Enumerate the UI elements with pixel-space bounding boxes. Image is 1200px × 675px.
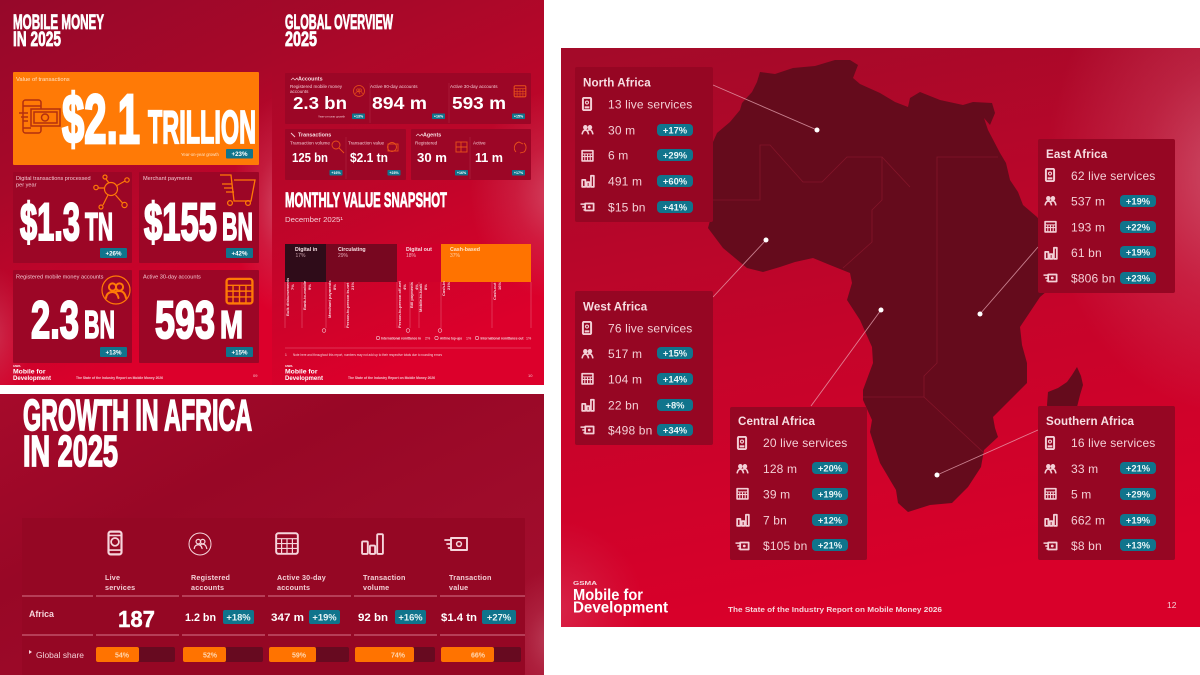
callout: west africa: $498 bn	[608, 424, 652, 438]
card: agents	[411, 129, 531, 180]
callout: west africa: West Africa	[583, 300, 648, 314]
map: regional borders	[713, 145, 998, 452]
chart: monthly value bars: 21%	[350, 282, 355, 290]
chart: monthly value bars: 37%	[450, 253, 461, 259]
growth badges: +15%	[514, 115, 524, 119]
heading	[23, 391, 252, 476]
heading: 2025	[285, 28, 317, 51]
growth badges: +16%	[457, 171, 467, 175]
footer	[285, 365, 533, 382]
footer: Development	[573, 600, 668, 616]
card: active accounts: M	[220, 304, 243, 347]
chart: monthly value bars: 29%	[338, 253, 349, 259]
card: registered accounts: BN	[84, 304, 115, 347]
callout: west africa: 104 m	[608, 372, 642, 386]
chart: monthly value bars: Digital out	[406, 247, 432, 253]
row: global share bars: Global share	[36, 651, 84, 660]
column headers: Live	[105, 573, 120, 582]
growth badge: +23%	[232, 151, 248, 158]
chart: monthly value bars: Mobile-to-bank	[418, 283, 423, 312]
column headers: Active 30-day	[277, 573, 326, 582]
callout: west africa: +14%	[663, 374, 688, 384]
callout: west africa: 76 live services	[608, 322, 692, 336]
footer	[13, 365, 258, 382]
card: accounts: accounts	[290, 89, 309, 94]
column headers: accounts	[277, 583, 310, 592]
row: africa: +16%	[398, 612, 423, 622]
card: transactions: $2.1 tn	[350, 150, 388, 165]
card: active accounts: 593	[155, 291, 215, 350]
row: global share bars: 66%	[471, 652, 486, 660]
map: africa silhouette	[708, 60, 1085, 512]
chart: monthly value bars: 21%	[446, 282, 451, 290]
leader lines and dots	[713, 85, 1038, 478]
callout: central africa: +21%	[818, 540, 843, 550]
row: africa: +19%	[312, 612, 337, 622]
card: merchant payments: BN	[222, 206, 253, 249]
row: global share bars: 52%	[203, 652, 218, 660]
heading: GLOBAL OVERVIEW	[285, 11, 393, 34]
row: africa: 92 bn	[358, 612, 388, 624]
footer: 10	[528, 373, 533, 378]
chart: monthly value bars: 16%	[497, 282, 502, 290]
growth badges: +16%	[434, 115, 444, 119]
callout: central africa: $105 bn	[763, 539, 807, 553]
footer: Mobile for	[573, 587, 643, 604]
row: africa: 347 m	[271, 612, 304, 624]
chart: monthly value bars: Bill payments	[409, 281, 414, 308]
callout: central africa: 20 live services	[763, 436, 847, 450]
card: value of transactions: Value of transactions	[16, 77, 70, 83]
card: active accounts: Active 30-day accounts	[143, 274, 201, 280]
row: africa: +18%	[226, 612, 251, 622]
row: global share bars: 74%	[391, 652, 406, 660]
callout: north africa: 491 m	[608, 174, 642, 188]
card: accounts: Year-on-year growth	[318, 114, 345, 118]
row: africa: Africa	[29, 609, 54, 619]
legend: minor categories: 2%	[425, 336, 431, 340]
callout: east africa: 61 bn	[1071, 246, 1102, 260]
card: merchant payments: Merchant payments	[143, 176, 192, 182]
chart: monthly value bars: Merchant payments	[327, 280, 332, 318]
callout: north africa	[575, 67, 713, 222]
column headers: value	[449, 583, 468, 592]
footer: Mobile for	[285, 368, 318, 376]
row: global share bars	[29, 647, 521, 662]
callout: southern africa: 16 live services	[1071, 436, 1155, 450]
card: value of transactions: $2.1	[62, 80, 140, 158]
footer: Development	[285, 375, 324, 382]
heading	[13, 11, 104, 51]
callout: north africa: 13 live services	[608, 98, 692, 112]
row: global share bars: 59%	[292, 652, 307, 660]
card: registered accounts: 2.3	[31, 291, 79, 350]
callout: east africa: +19%	[1126, 196, 1151, 206]
footer: Development	[13, 375, 52, 382]
column headers: accounts	[191, 583, 224, 592]
legend: minor categories	[376, 336, 532, 340]
heading: monthly value snapshot: MONTHLY VALUE SNAPSHOT	[285, 189, 447, 212]
growth badges: +16%	[331, 171, 341, 175]
footer: The State of the Industry Report on Mobile Money 2026	[728, 605, 942, 614]
column headers: Registered	[191, 573, 230, 582]
card: accounts: Active 90-day accounts	[370, 84, 418, 89]
footer: The State of the Industry Report on Mobile Money 2026	[348, 376, 435, 380]
chart: monthly value bars: 8%	[423, 284, 428, 290]
growth badges	[352, 114, 525, 119]
callout: southern africa: +19%	[1126, 514, 1151, 526]
icons	[354, 86, 526, 97]
callout: central africa: 39 m	[763, 488, 790, 502]
heading: IN 2025	[23, 427, 118, 476]
column headers: volume	[363, 583, 389, 592]
growth badge	[226, 149, 253, 158]
chart: monthly value bars: Cash-out	[492, 282, 497, 300]
callout: southern africa: 662 m	[1071, 514, 1105, 528]
callout: west africa	[575, 291, 713, 445]
chart: monthly value bars: 18%	[406, 253, 417, 259]
callout: southern africa	[1038, 406, 1175, 560]
column headers: Transaction	[449, 573, 492, 582]
heading	[285, 11, 393, 51]
callout: east africa: East Africa	[1046, 148, 1108, 161]
chart: monthly value bars: 17%	[296, 253, 306, 259]
footer: 09	[253, 373, 258, 378]
callout: central africa: 7 bn	[763, 514, 787, 528]
card: accounts	[285, 73, 531, 124]
icons	[108, 532, 467, 555]
callout: east africa: 537 m	[1071, 194, 1105, 208]
card: accounts: 894 m	[372, 93, 427, 113]
legend: minor categories: 1%	[526, 336, 532, 340]
callout: southern africa: +21%	[1126, 462, 1151, 474]
callout: north africa: +17%	[663, 124, 688, 136]
footer: GSMA	[285, 365, 293, 368]
callout: southern africa: 5 m	[1071, 488, 1091, 502]
callout: southern africa: 33 m	[1071, 462, 1098, 476]
callout: north africa: $15 bn	[608, 200, 646, 214]
growth badges	[455, 170, 525, 176]
callout: north africa: 30 m	[608, 124, 635, 138]
card: digital transactions: TN	[85, 206, 113, 249]
callout: central africa: Central Africa	[738, 415, 815, 428]
card: digital transactions: per year	[16, 182, 37, 188]
panel: growth in africa	[0, 391, 544, 675]
chart: monthly value bars: 9%	[307, 284, 312, 290]
card: agents: Active	[473, 140, 486, 146]
callout: north africa: North Africa	[583, 76, 651, 90]
callout: central africa: +12%	[818, 514, 843, 526]
callout: north africa: +29%	[663, 150, 688, 160]
callout: central africa: +20%	[818, 462, 843, 474]
row: africa: +27%	[487, 612, 512, 622]
table: africa metrics	[22, 518, 525, 675]
growth badge: +13%	[106, 349, 122, 356]
growth badges: +13%	[354, 115, 364, 119]
heading: MOBILE MONEY	[13, 11, 104, 34]
row: africa	[29, 606, 516, 632]
card: accounts: Registered mobile money	[290, 84, 343, 89]
card: transactions: Transaction volume	[290, 140, 330, 146]
chart: monthly value bars: 8%	[332, 284, 337, 290]
footnote: Note here and throughout this report, numbers may not add up to their respective totals due to rounding errors	[293, 353, 442, 357]
card: merchant payments	[139, 172, 259, 263]
icon: calendar	[227, 279, 252, 303]
callout: west africa: 22 bn	[608, 398, 639, 412]
growth badges: +17%	[514, 171, 524, 175]
chart: monthly value bars: Circulating	[338, 247, 366, 253]
legend: minor categories: Airtime top-ups	[440, 336, 463, 340]
card: value of transactions: TRILLION	[148, 101, 256, 153]
card: accounts: Accounts	[298, 76, 323, 82]
legend: minor categories: International remittance out	[480, 336, 524, 340]
callout: north africa: 6 m	[608, 148, 628, 162]
growth badges: +23%	[389, 171, 399, 175]
card: accounts: 593 m	[452, 93, 506, 113]
footer: Mobile for	[13, 368, 46, 376]
callout: southern africa: +29%	[1126, 488, 1151, 500]
chart: monthly value bars: Bulk disbursements	[285, 277, 290, 316]
callout: north africa: +41%	[663, 202, 688, 212]
legend: minor categories: 1%	[466, 336, 472, 340]
card: digital transactions: Digital transactions processed	[16, 176, 91, 182]
column headers: services	[105, 583, 135, 592]
callout: southern africa: +13%	[1126, 540, 1151, 550]
card: registered accounts	[13, 270, 132, 363]
footer: The State of the Industry Report on Mobile Money 2026	[76, 376, 163, 380]
card: digital transactions: $1.3	[20, 193, 80, 252]
map: madagascar	[1047, 367, 1083, 430]
callout: east africa	[1038, 139, 1175, 293]
heading: monthly value snapshot	[285, 189, 447, 224]
footer: GSMA	[13, 365, 21, 368]
callout: east africa: 193 m	[1071, 220, 1105, 234]
callout: east africa: 62 live services	[1071, 169, 1155, 183]
callout: west africa: 517 m	[608, 347, 642, 361]
heading: monthly value snapshot: December 2025¹	[285, 215, 344, 224]
card: accounts: 2.3 bn	[293, 93, 347, 113]
icons	[332, 141, 398, 153]
row: africa: $1.4 tn	[441, 612, 477, 624]
chart: monthly value bars: 7%	[290, 284, 295, 290]
footnote: 1	[285, 353, 287, 357]
callout: east africa: $806 bn	[1071, 272, 1115, 286]
chart: monthly value bars: Digital in	[295, 247, 317, 253]
chart: monthly value bars: Person-to-person in-net	[345, 282, 350, 328]
card: value of transactions: Year-on-year growth	[181, 152, 219, 157]
card: agents: Agents	[423, 132, 441, 138]
callout: east africa: +22%	[1126, 222, 1151, 232]
callout: east africa: +19%	[1126, 246, 1151, 258]
card: value of transactions	[13, 72, 259, 165]
chart: monthly value bars: Cash-in	[441, 281, 446, 296]
card: active accounts	[139, 270, 259, 363]
callout: north africa: +60%	[663, 176, 688, 186]
chart: monthly value bars: 4%	[402, 284, 407, 290]
column headers: Transaction	[363, 573, 406, 582]
row: africa: 1.2 bn	[185, 612, 216, 624]
callout: west africa: +15%	[663, 348, 688, 358]
chart: monthly value bars: Person-to-person off-net	[397, 280, 402, 328]
icon: phone with cash	[19, 100, 60, 133]
panel: mobile money in 2025	[0, 0, 272, 385]
row: global share bars: 54%	[115, 652, 130, 660]
icon: network	[94, 175, 129, 209]
chart: monthly value bars: 4%	[414, 284, 419, 290]
footer: GSMA	[573, 581, 598, 587]
callout: east africa: +23%	[1126, 272, 1151, 284]
chart: monthly value bars: Cash-based	[450, 247, 480, 253]
growth badge: +26%	[106, 250, 122, 257]
row: africa: 187	[118, 606, 155, 632]
callout: southern africa: Southern Africa	[1046, 415, 1134, 428]
callout: west africa: +34%	[663, 424, 688, 436]
callout: central africa: 128 m	[763, 462, 797, 476]
callout: west africa: +8%	[665, 400, 685, 410]
icon: people in circle	[102, 276, 130, 304]
card: merchant payments: $155	[144, 193, 217, 252]
card: agents: 11 m	[475, 150, 503, 165]
card: transactions	[285, 129, 406, 180]
chart: monthly value bars: Bank-to-mobile	[302, 280, 307, 310]
card: accounts: Active 30-day accounts	[450, 84, 498, 89]
legend: minor categories: International remittance in	[381, 336, 421, 340]
heading: IN 2025	[13, 28, 61, 51]
growth badges	[330, 170, 400, 176]
card: digital transactions	[13, 172, 132, 263]
chart: monthly value bars	[285, 244, 531, 332]
column headers	[105, 573, 492, 592]
callout: central africa	[730, 407, 867, 560]
heading: GROWTH IN AFRICA	[23, 391, 252, 440]
panel: africa map	[561, 48, 1200, 627]
footer: 12	[1167, 600, 1177, 610]
callout: central africa: +19%	[818, 488, 843, 500]
card: agents: 30 m	[417, 150, 447, 165]
growth badge: +42%	[232, 250, 248, 257]
growth badge: +15%	[232, 349, 248, 356]
card: transactions: Transactions	[298, 132, 331, 138]
card: agents: Registered	[415, 140, 438, 146]
callout: southern africa: $8 bn	[1071, 539, 1102, 553]
panel: global overview and snapshot	[272, 0, 544, 385]
card: transactions: Transaction value	[348, 140, 385, 146]
icons	[456, 142, 526, 153]
card: registered accounts: Registered mobile money accounts	[16, 274, 104, 280]
footer	[573, 581, 1177, 616]
icon: cart	[220, 175, 255, 205]
card: transactions: 125 bn	[292, 150, 328, 165]
